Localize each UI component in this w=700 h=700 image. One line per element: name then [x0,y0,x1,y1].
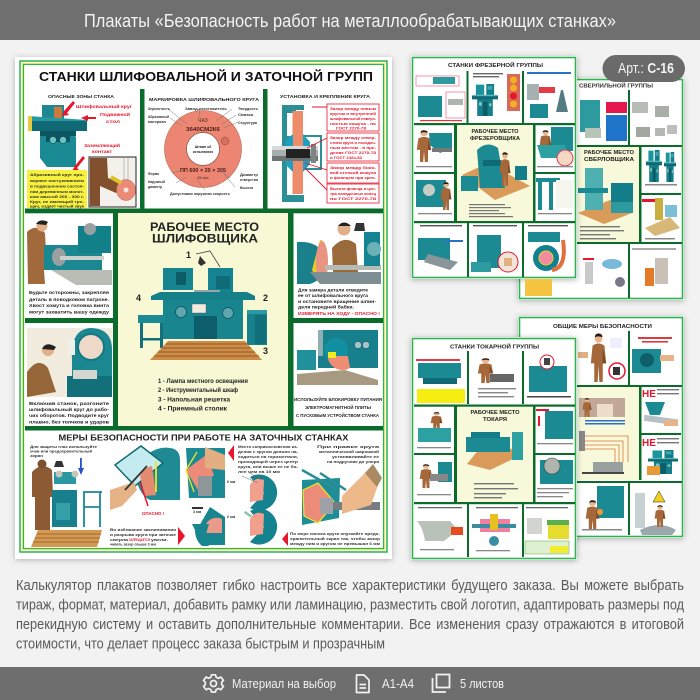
wear correction text: При правке круга [317,445,381,449]
magnetic plate text [294,395,382,418]
red spec box 2: ным местом - в пре- [330,146,376,150]
red spec box 2: стием круга и посадоч- [330,141,376,145]
marking labels: отверстия [240,178,258,182]
bottom section diagram [472,507,518,551]
calculator description: стоимости, что делает процесс заказа быстрым и прозрачным [16,636,385,652]
left lower milling [416,180,452,214]
central panel: grinder workplace: ШЛИФОВЩИКА [152,232,258,246]
main heading: СТАНКИ ШЛИФОВАЛЬНОЙ И ЗАТОЧНОЙ ГРУПП [39,69,373,84]
caution text [29,290,110,314]
red spec box 1: ГОСТ 2270-78 [336,126,366,130]
worker in overalls [578,333,625,382]
marker triangle left [178,527,185,545]
red spec box 2: делах ГОСТ 2270-78 [330,151,376,155]
tool rest text: делия с кругом должно на- [238,450,299,454]
red spec box 1: кругом и внутренней [330,112,376,116]
central panel: grinder workplace [136,220,268,412]
red spec box 4: тра наладочных колец [330,192,377,196]
milling panel 1 [416,76,465,121]
legend lines [580,226,624,239]
guard dial lower [227,508,277,544]
danger labels [76,104,132,154]
operator at machine [27,220,112,285]
guard dial upper [227,472,277,510]
guard dial upper: 6 мм [227,480,236,484]
poster: milling machines [411,56,577,279]
tip heat diagrams [583,248,676,287]
marking labels: Диаметр [240,173,259,177]
fallen worker warning [635,491,676,535]
clearance warning text: чивать зазор свыше 3 мм [110,542,156,546]
eye protection text: экран [30,454,43,458]
central heading: РАБОЧЕЕ МЕСТО [150,220,259,234]
article badge: Арт.: С-16 [618,60,674,77]
marking labels: Допустимая окружная скорость [170,192,231,196]
tool rest text: проходящей через центр [238,460,299,464]
red spec box 1: Зазор между новым [330,107,377,111]
caution text: Будьте осторожны, закрепляя [29,290,109,295]
workplace heading: РАБОЧЕЕ МЕСТО [472,129,519,135]
marker triangle middle [228,445,234,461]
grinding wheel: 35 м/с [197,175,209,180]
milling panel 2 [472,73,520,116]
poster heading: СВЕРЛИЛЬНОЙ ГРУППЫ [579,82,653,90]
marking labels: Завод-изготовитель [185,107,228,111]
section heading: МЕРЫ БЕЗОПАСНОСТИ ПРИ РАБОТЕ НА ЗАТОЧНЫХ СТАНКАХ [58,432,349,442]
lathe panel 3 [527,355,571,398]
danger labels: контакт [92,149,113,154]
danger labels: стол [106,119,120,124]
grinding wheel: Штамп об [195,145,211,149]
yellow chart peek from drilling poster [525,279,552,296]
yellow warning text: щин, издаёт чистый звук [30,204,84,208]
number labels: 4 [136,293,141,303]
panel: dangerous zones [27,94,136,208]
grinding wheel [164,110,242,188]
yellow warning text [27,170,87,208]
red spec box 3 [327,163,379,183]
poster heading: ОБЩИЕ МЕРЫ БЕЗОПАСНОСТИ [553,324,652,330]
bottom workplace worker [582,486,624,530]
workplace legend: 3 - Напольная решетка [158,398,231,404]
lathe panel 2 [478,358,516,397]
bottom cutter diagram [417,507,463,550]
footer bar [0,667,700,700]
surface grinder closeup [297,330,378,385]
worker measuring [297,222,381,284]
poster: turning machines [411,337,577,560]
size label: А1-А4 [382,676,414,691]
poster: turning machines: ТОКАРЯ [483,417,507,423]
left milling operator [416,130,452,167]
clearance warning text: Во избежание заклинивания [110,528,176,532]
tool rest text [238,445,299,474]
wear correction text: металлической шарошкой [319,450,379,454]
milling panel 3 [527,72,571,118]
poster heading: СТАНКИ ТОКАРНОЙ ГРУППЫ [450,342,539,350]
number labels: 1 [186,250,191,260]
tool rest text: лее чем на 10 мм [238,470,280,474]
calculator description [16,577,684,652]
right milling operator [537,127,573,167]
clearance warning text: ЗАПРЕЩАЕТСЯ [129,538,150,542]
right lathe detail [536,409,573,444]
number labels: 2 [263,293,268,303]
marking labels: Абразивный [148,115,169,119]
grinding wheel: испытаниях [193,150,213,154]
icon: sheets [432,674,450,692]
panel: measurement warning [297,222,381,316]
machine hand button [632,337,674,373]
magnetic plate text: С ПУСКОВЫМ УСТРОЙСТВОМ СТАНКА [296,411,380,418]
measurement text: деля передней бабки. [298,304,354,310]
warning НЕ bottom: НЕ [642,438,656,449]
clearance warning text [110,528,176,546]
caution text: Хвост хомута и головка винта [29,303,110,308]
caution text: могут захватить вашу одежду [29,310,110,314]
tool rest text: Место соприкосновения из- [238,445,299,449]
red spec box 1: ностью кожуха - по [330,122,376,126]
wear correction text [317,445,381,464]
red spec box 1 [327,104,379,131]
panel heading: МАРКИРОВКА ШЛИФОВАЛЬНОГО КРУГА [149,97,260,102]
danger labels: Заземляющий [84,143,120,148]
tool rest text: круга, или выше ее не бо- [238,465,299,469]
startup text: шлифовальный круг до рабо- [29,406,110,412]
red spec box 3: и фланцем при креп- [330,176,376,180]
yellow warning text: нии деревянным молот- [30,190,85,194]
marking labels: Структура [238,121,258,125]
warning НЕ top [642,389,679,426]
guard image: ОПАСНО ! [142,511,165,516]
hand tapping wheel photo [89,157,136,207]
workplace photo and wiring [579,398,628,474]
red spec box 1: шлифовальной поверх- [330,117,376,121]
warning НЕ bottom [642,438,679,475]
workplace legend [469,204,513,217]
marking labels: диаметр [148,185,163,189]
bottom milling panel 2 [471,225,518,272]
eye protection text: Для защиты глаз используйте [30,445,97,449]
poster: drilling machines (back right top): СВЕРЛОВЩИКА [584,157,634,163]
panel: wheel mounting [272,94,379,203]
bottom milling panel 1 [418,225,463,270]
marking leader lines [168,109,238,190]
red spec box 4: Высота фланца и цен- [330,187,376,191]
danger labels: Подвижной [100,112,130,117]
icon: document [356,675,369,692]
small drill machine [645,150,677,186]
drill workplace machine [578,168,633,224]
guard gap text: По мере износа круга опускайте предо- [290,532,381,536]
workplace heading: РАБОЧЕЕ МЕСТО [470,410,520,416]
workplace legend [158,379,248,412]
lathe workplace [466,432,523,470]
startup text: чих оборотов. Подводите круг [29,412,109,418]
lathe panel 1 [416,359,465,403]
tool rest closeup [186,447,225,498]
wear correction text: на подручник до упора [327,460,380,464]
red warning arrows [62,101,96,171]
surface grinder [28,105,87,167]
icon: gear [204,675,224,692]
marking labels [148,107,259,196]
drill press panel [580,100,627,141]
guard gap text: между ним и кругом не превышал 6 мм [290,542,380,546]
yellow warning text: веряют постукиванием [30,179,84,183]
right lathe chuck [537,458,573,497]
workplace legend: 1 - Лампа местного освещения [158,379,248,385]
gap diagram [192,507,225,546]
workplace legend: 2 - Инструментальный шкаф [158,387,238,394]
panel: startup warning [27,328,112,424]
panel: magnetic plate [294,330,382,418]
universal grinder [138,251,267,360]
number labels: 3 [263,346,268,356]
danger labels: Шлифовальный круг [76,104,132,109]
yellow warning text: Абразивный круг про- [30,173,85,177]
yellow warning text: ком массой 200 - 300 г. [30,195,84,199]
yellow warning text: Круг, не имеющий тре- [30,200,85,204]
workplace heading: РАБОЧЕЕ МЕСТО [584,150,634,156]
marking labels: Высота [240,186,254,190]
red spec box 2 [327,133,379,161]
bottom table diagram [525,507,569,554]
caution text: деталь в поводковом патроне. [29,297,109,302]
panel: sharpening safety [30,432,382,547]
magnetic plate text: ИСПОЛЬЗУЙТЕ БЛОКИРОВКУ ПИТАНИЯ [294,395,382,402]
red spec box 4 [327,184,379,203]
marking labels: Связка [238,113,254,117]
red arrows to details [305,107,327,190]
main poster: grinding machines [15,57,392,559]
guard gap text [290,532,381,546]
startup text: Включив станок, разгоните [29,401,110,406]
panel heading: ОПАСНЫЕ ЗОНЫ СТАНКА [48,94,115,99]
grinding wheel: 3640СМ2К6 [186,127,220,133]
marker triangle right [282,532,288,546]
clearance warning text: и разрыва круга при заточке [110,533,176,537]
red spec box 3: Зазор между боко- [330,166,376,170]
gap diagram: 3 мм [193,510,202,514]
panel: wheel marking [148,97,260,196]
article badge [602,55,685,82]
red spec box 4: по ГОСТ 2270-78 [330,197,376,201]
clearance warning text: сверла [110,538,129,542]
right lower diagram [536,178,573,214]
poster heading: СТАНКИ ФРЕЗЕРНОЙ ГРУППЫ [448,61,543,69]
clearance warning text: увели- [151,538,169,542]
red spec box 2: и ГОСТ 2424-83 [330,156,362,160]
poster: milling machines: ФРЕЗЕРОВЩИКА [470,136,520,142]
measurement text: ее от шлифовального круга [298,292,368,298]
dressing image [302,464,382,525]
measurement text: Для замера детали отведите [298,288,368,292]
marking labels: материал [148,120,167,124]
number labels [136,250,268,356]
worker with hood [27,328,112,397]
wear correction text: устанавливайте ее [332,455,379,459]
tool rest text: ходиться на горизонтали, [238,455,298,459]
marking labels: Твердость [238,107,259,111]
sheets label: 5 листов [460,676,504,691]
header bar [0,0,700,40]
panel heading: УСТАНОВКА И КРЕПЛЕНИЕ КРУГА [280,94,371,99]
bottom milling panel 3 [528,225,568,271]
red spec box 3: вой стенкой кожуха [330,171,376,175]
vise icons panel [632,102,677,137]
marking labels: Наружный [148,180,165,184]
guard gap text: хранительный экран так, чтобы зазор [290,537,381,541]
eye protection text [30,445,97,458]
magnetic plate text: ЭЛЕКТРОМАГНИТНОЙ ПЛИТЫ [305,403,371,410]
mounting cross-section [272,105,322,202]
measurement text: ИЗМЕРЯТЬ НА ХОДУ - ОПАСНО ! [298,311,381,316]
marking labels: Зернистость [148,107,171,111]
left lower operator [417,462,452,495]
measurement text [298,288,381,316]
milling workplace scene [461,144,530,200]
danger drill image [642,198,680,240]
eye protection text: очки или предохранительный [30,450,92,454]
yellow warning text: в подвешенном состоя- [30,184,85,188]
page title: Плакаты «Безопасность работ на металлообрабатывающих станках» [84,11,616,31]
poster: general safety (back right bottom) [518,316,684,538]
workplace legend: 4 - Приемный столик [158,406,227,412]
red spec box 2: Зазор между отвер- [330,136,376,140]
sharpener workplace [31,458,102,547]
grinding wheel: ЧАЗ [198,118,208,124]
marking labels: Форма [148,172,160,176]
guard dial lower: 6 мм [227,515,236,519]
guard image [110,446,180,516]
poster: drilling machines (back right top) [518,78,684,300]
measurement text: и остановите вращение шпин- [298,299,377,304]
grinding wheel: ПП 600 × 20 × 305 [180,168,226,174]
workplace legend [474,483,518,498]
startup text [29,401,110,424]
material label: Материал на выбор [232,676,336,691]
warning НЕ top: НЕ [642,389,656,400]
left lathe operator [417,412,451,448]
startup text: плавно, без толчков и ударов [29,418,109,424]
panel: chuck warning [27,220,112,314]
